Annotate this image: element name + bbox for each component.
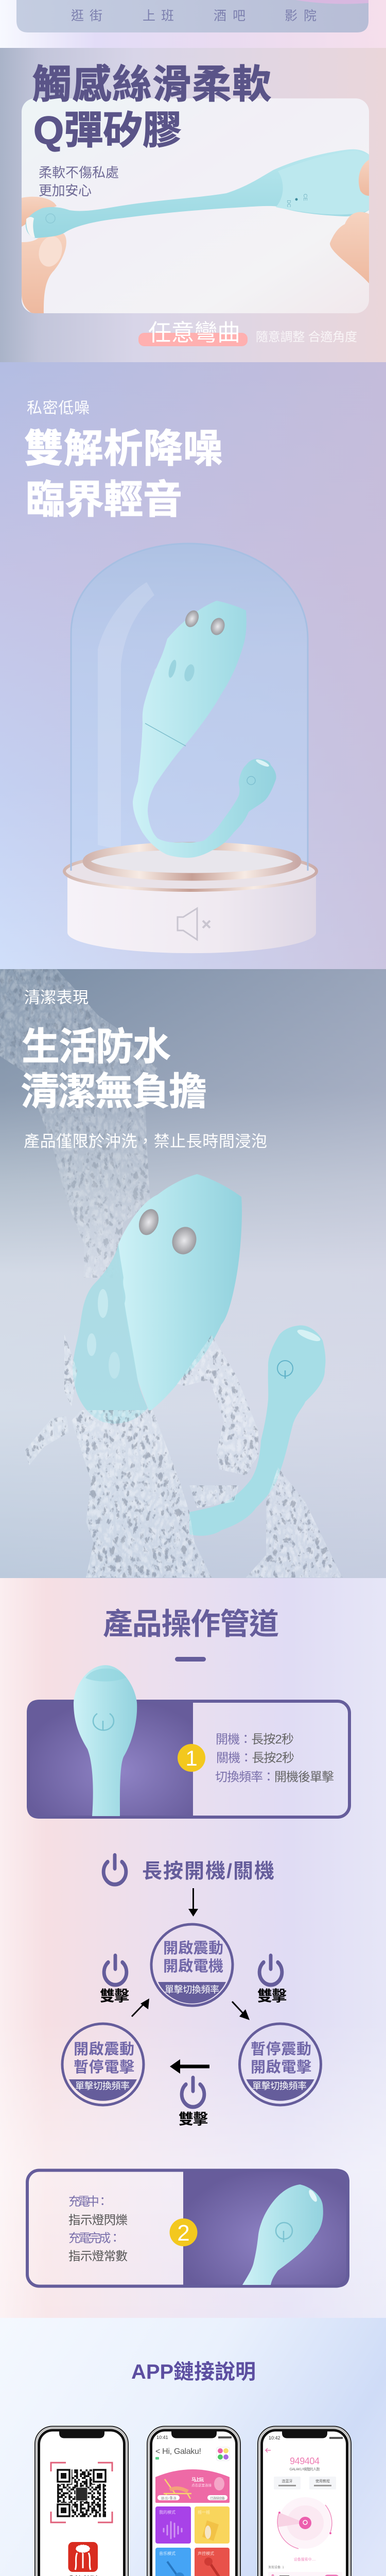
card: play now bbox=[155, 2469, 230, 2503]
section: app connection bbox=[0, 2318, 386, 2576]
tile: voice: 声控模式 bbox=[198, 2551, 214, 2556]
phone: connect bbox=[258, 2427, 351, 2576]
text: greeting: < Hi, Galaku! bbox=[155, 2447, 201, 2456]
heading: silky soft touch bbox=[32, 63, 271, 152]
callout: bend freely bbox=[138, 319, 357, 346]
text: soft and safe bbox=[39, 165, 119, 198]
card: play now: 马上玩 bbox=[191, 2477, 204, 2482]
badge: step 1 bbox=[178, 1744, 205, 1772]
card: discovered device: 设备搜索中.... bbox=[294, 2557, 315, 2562]
tile: music bbox=[155, 2548, 191, 2576]
arrow: left bbox=[170, 2059, 209, 2074]
card: play now: 点击这里连接 bbox=[191, 2483, 212, 2487]
heading: long press: 長按開機/關機 bbox=[142, 1860, 274, 1883]
icon: status tiles bbox=[155, 2447, 230, 2461]
scene labels: 酒吧 bbox=[214, 9, 245, 23]
labels: double click bbox=[100, 1988, 287, 2128]
labels: double click: 雙擊 bbox=[179, 2111, 208, 2128]
scene labels: 上班 bbox=[143, 9, 174, 23]
text: charging status: 充電中： bbox=[68, 2195, 109, 2208]
heading: waterproof easy clean: 清潔無負擔 bbox=[21, 1070, 207, 1113]
scene labels: 影院 bbox=[285, 9, 317, 23]
panel: power instructions bbox=[27, 1665, 349, 1819]
phone: open app: 10:41 bbox=[156, 2435, 168, 2440]
text: eyebrow low noise: 私密低噪 bbox=[27, 400, 90, 417]
tile: my mode: 我的模式 bbox=[159, 2510, 176, 2515]
icon: power large bbox=[103, 1855, 126, 1885]
heading: dual noise reduction: 臨界輕音 bbox=[26, 478, 182, 522]
card: discovered device: 发现设备: 1 bbox=[268, 2565, 284, 2569]
node: vibration on shock paused bbox=[62, 2024, 144, 2105]
icon: scan frame bbox=[51, 2463, 112, 2522]
text: power steps bbox=[215, 1733, 334, 1784]
node: vibration on motor on bbox=[151, 1924, 233, 2006]
text: rinse only note: 產品僅限於沖洗，禁止長時間浸泡 bbox=[24, 1132, 267, 1150]
cards: bluetooth and tutorial bbox=[274, 2477, 336, 2489]
icon: right hand bbox=[330, 160, 369, 283]
photo: glass dome outline bbox=[71, 544, 308, 871]
section: scenes strip bbox=[0, 0, 386, 48]
text: soft and safe: 更加安心 bbox=[39, 183, 92, 198]
cards: bluetooth and tutorial: 连蓝牙 bbox=[282, 2479, 292, 2483]
icon: power bottom bbox=[182, 2078, 204, 2107]
section: low noise bbox=[0, 362, 386, 969]
photo: product in dome bbox=[133, 601, 276, 858]
node: vibration on motor on: 單擊切換頻率 bbox=[165, 1985, 219, 1995]
text: charging status: 充電完成： bbox=[68, 2231, 121, 2245]
node: vibration paused shock on: 開啟電擊 bbox=[251, 2059, 311, 2076]
text: soft and safe: 柔軟不傷私處 bbox=[39, 165, 119, 180]
callout: bend freely: 隨意調整 合適角度 bbox=[256, 330, 357, 344]
photo: product under water bbox=[73, 1174, 325, 1536]
panel: charging bbox=[27, 2169, 349, 2287]
node: vibration on motor on: 開啟電機 bbox=[163, 1958, 223, 1975]
chart: mode cycle bbox=[62, 1924, 321, 2128]
card: discovered device bbox=[268, 2557, 342, 2576]
node: vibration on shock paused: 單擊切換頻率 bbox=[75, 2081, 130, 2091]
icon: mute speaker bbox=[178, 908, 210, 940]
scene labels bbox=[71, 9, 317, 23]
icon: qr code bbox=[57, 2470, 106, 2516]
icon: back arrow bbox=[266, 2448, 271, 2452]
labels: double click: 雙擊 bbox=[257, 1988, 287, 2005]
text: counter: GALAKU 唤醒的人数 bbox=[289, 2467, 320, 2471]
icon: galaku app bbox=[68, 2542, 98, 2572]
node: vibration paused shock on: 暫停震動 bbox=[251, 2041, 311, 2058]
heading: dual noise reduction: 雙解析降噪 bbox=[24, 427, 222, 471]
arrow: up right bbox=[132, 1998, 149, 2016]
icon: bent product bbox=[26, 149, 369, 238]
icon: product head bbox=[242, 2184, 323, 2285]
text: counter bbox=[289, 2456, 320, 2471]
heading: silky soft touch: Q彈矽膠 bbox=[33, 109, 182, 152]
labels: double click: 雙擊 bbox=[100, 1988, 129, 2005]
card: play now: 已连接设备 bbox=[210, 2496, 225, 2500]
node: vibration paused shock on bbox=[240, 2024, 321, 2105]
phone: open app bbox=[147, 2427, 240, 2576]
chart: radar bbox=[277, 2497, 332, 2549]
card: play now: 退出/重连 bbox=[161, 2496, 177, 2500]
node: vibration on shock paused: 暫停電擊 bbox=[74, 2059, 134, 2076]
heading: waterproof easy clean: 生活防水 bbox=[22, 1025, 171, 1068]
cards: bluetooth and tutorial: 使用教程 bbox=[315, 2479, 330, 2483]
heading: silky soft touch: 觸感絲滑柔軟 bbox=[32, 63, 271, 107]
arrow: down right bbox=[232, 2002, 250, 2020]
photo: base ring bbox=[64, 846, 317, 953]
photo: splashing water bbox=[25, 1334, 342, 1578]
icon: product button end bbox=[74, 1665, 137, 1816]
node: vibration on shock paused: 開啟震動 bbox=[74, 2041, 134, 2058]
icon: qr finder marks bbox=[56, 2468, 107, 2518]
badge: step 2 bbox=[170, 2218, 198, 2246]
text: charging status: 指示燈常數 bbox=[68, 2249, 128, 2263]
callout: bend freely: 任意彎曲 bbox=[148, 319, 240, 346]
photo: upper water stream bbox=[0, 969, 157, 1278]
arrow: down bbox=[188, 1888, 198, 1917]
tile: shake: 摇一摇 bbox=[198, 2510, 210, 2515]
icon: bent product: DC bbox=[286, 200, 291, 207]
text: charging status: 指示燈閃爍 bbox=[68, 2213, 128, 2227]
tile: music: 音乐模式 bbox=[159, 2551, 176, 2556]
divider dash bbox=[175, 1657, 206, 1662]
text: power steps: 切換頻率：開機後單擊 bbox=[215, 1770, 334, 1784]
icon: bent product: CE bbox=[302, 194, 308, 201]
section: waterproof bbox=[0, 969, 386, 1578]
section: soft silicone bbox=[0, 48, 386, 362]
icon: left hand bbox=[22, 197, 66, 313]
photo: glass dome back bbox=[71, 544, 308, 888]
text: power steps: 開機：長按2秒 bbox=[216, 1733, 294, 1747]
panel: scenes bbox=[16, 0, 369, 32]
panel: photo of hands bending product bbox=[22, 98, 369, 313]
scene labels: 逛街 bbox=[71, 9, 102, 23]
badge: step 2: 2 bbox=[177, 2221, 190, 2246]
tile: voice bbox=[195, 2548, 230, 2576]
icon: power left bbox=[104, 1956, 127, 1985]
phone: scan bbox=[35, 2427, 128, 2576]
tile: my mode bbox=[155, 2506, 191, 2544]
heading: waterproof easy clean bbox=[21, 1025, 207, 1113]
text: counter: 949404 bbox=[290, 2456, 320, 2466]
heading: app connection: APP鏈接說明 bbox=[131, 2361, 256, 2383]
icon: power right bbox=[259, 1956, 282, 1985]
phone: connect: 10:42 bbox=[269, 2435, 280, 2441]
text: power steps: 關機：長按2秒 bbox=[216, 1751, 294, 1765]
section: product operation bbox=[0, 1578, 386, 2318]
node: vibration paused shock on: 單擊切換頻率 bbox=[252, 2081, 307, 2091]
node: vibration on motor on: 開啟震動 bbox=[163, 1940, 223, 1957]
heading: product operation: 產品操作管道 bbox=[103, 1607, 279, 1641]
heading: dual noise reduction bbox=[24, 427, 222, 522]
text: charging status bbox=[68, 2195, 128, 2263]
text: eyebrow cleaning: 清潔表現 bbox=[24, 989, 89, 1007]
tile: shake bbox=[195, 2506, 230, 2544]
badge: step 1: 1 bbox=[185, 1746, 198, 1770]
